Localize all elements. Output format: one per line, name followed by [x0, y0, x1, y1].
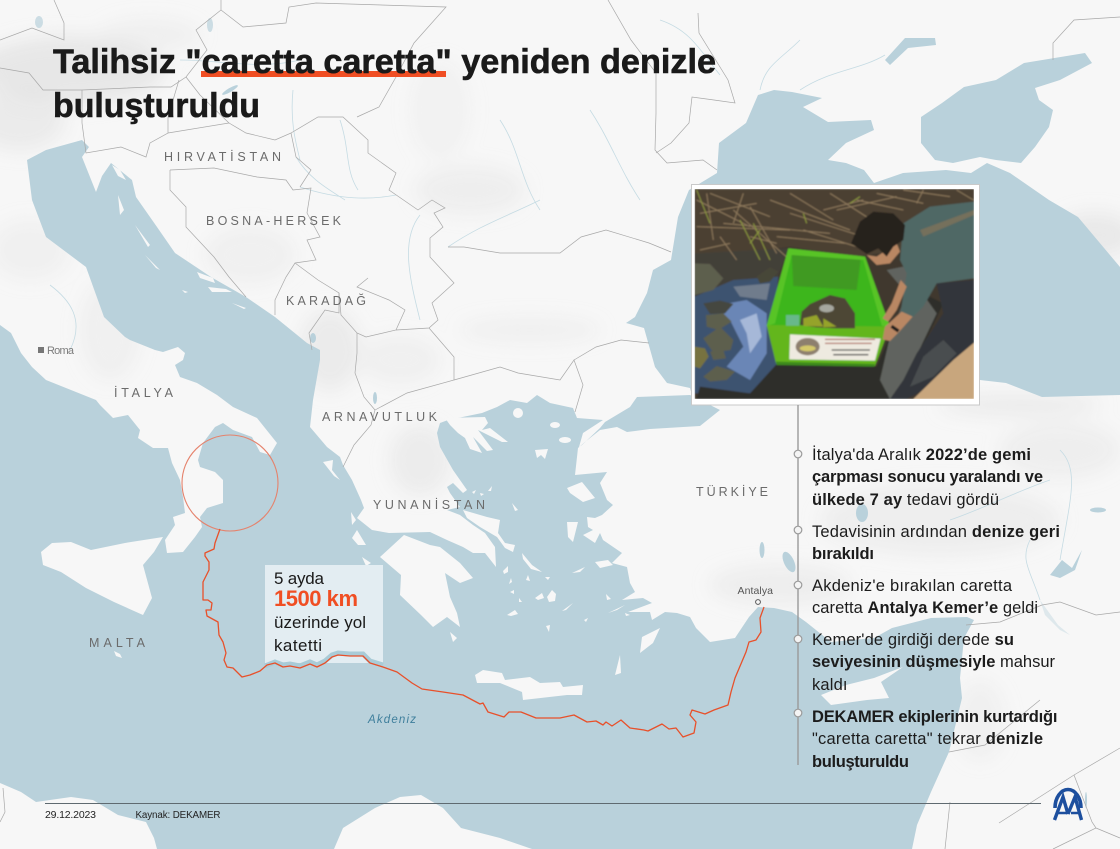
Chalkidiki	[445, 417, 508, 453]
man: waders	[890, 280, 974, 399]
water	[695, 277, 778, 393]
photo: rescued turtle	[692, 184, 980, 405]
Dalmatian islands	[118, 195, 246, 309]
crate label	[789, 334, 881, 361]
timeline text 2	[812, 523, 1060, 563]
title line 1: Talihsiz "caretta caretta" yeniden denizle	[53, 43, 716, 81]
label: Italy: İTALYA	[114, 386, 174, 400]
label: Malta: MALTA	[89, 636, 146, 650]
sea: Mediterranean, Adriatic and Aegean	[0, 140, 974, 849]
label: Turkey: TÜRKİYE	[696, 485, 768, 499]
timeline text 2: Tedavisinin ardından denize geri	[812, 523, 1060, 541]
turtle	[800, 295, 855, 328]
callout text: 1500 km	[274, 586, 358, 611]
timeline text 1: ülkede 7 ay tedavi gördü	[812, 491, 999, 509]
callout text	[274, 569, 366, 655]
timeline text 4: kaldı	[812, 676, 848, 694]
callout text: katetti	[274, 636, 322, 655]
title	[53, 43, 716, 125]
city marker: Antalya: Antalya	[738, 585, 773, 597]
timeline text 1: İtalya'da Aralık 2022’de gemi	[812, 445, 1031, 464]
icon: news agency logo	[1054, 790, 1082, 820]
rocks	[695, 263, 778, 382]
timeline text 1	[812, 445, 1043, 509]
Euboea	[463, 510, 515, 552]
rivers	[50, 20, 1072, 600]
timeline text 4	[812, 631, 1056, 694]
title line 2: buluşturuldu	[53, 87, 260, 125]
bank	[695, 189, 974, 399]
timeline text 4: Kemer'de girdiği derede su	[812, 631, 1014, 649]
label: Croatia: HIRVATİSTAN	[164, 150, 281, 164]
migration route	[203, 529, 764, 737]
Sicily	[41, 537, 163, 615]
highlight circle: Calabria	[182, 435, 278, 531]
city marker: Antalya	[738, 585, 773, 604]
label: Montenegro: KARADAĞ	[286, 293, 366, 308]
Lesbos, Chios, Samos, Ikaria, Kos	[567, 482, 625, 613]
timeline text 2: bırakıldı	[812, 545, 874, 563]
sea label: Akdeniz: Akdeniz	[367, 714, 416, 726]
footer	[45, 804, 1041, 821]
Karpathos	[615, 655, 621, 675]
callout: 1500 km	[265, 565, 383, 666]
man: shirt	[900, 202, 974, 317]
islands	[41, 165, 903, 705]
label: Bosnia: BOSNA-HERSEK	[206, 214, 342, 228]
timeline text 3: caretta Antalya Kemer’e geldi	[812, 599, 1038, 617]
Malta	[114, 651, 122, 658]
north Aegean and Cycladic islands	[450, 408, 630, 642]
route halo	[265, 653, 383, 666]
timeline text 3	[812, 577, 1038, 617]
label: Greece: YUNANİSTAN	[373, 498, 485, 512]
timeline text 1: çarpması sonucu yaralandı ve	[812, 468, 1043, 486]
city label: Roma: Roma	[47, 345, 75, 357]
country labels	[89, 150, 768, 650]
Ionian islands	[323, 460, 371, 566]
timeline text 5: DEKAMER ekiplerinin kurtardığı	[812, 708, 1058, 726]
label: Albania: ARNAVUTLUK	[322, 410, 438, 424]
timeline text 5	[812, 708, 1058, 771]
date: 29.12.2023	[45, 809, 96, 821]
Peloponnese	[380, 535, 473, 627]
Kvarner	[112, 165, 126, 180]
timeline text 3: Akdeniz'e bırakılan caretta	[812, 577, 1013, 595]
Crete	[475, 670, 583, 700]
callout text: üzerinde yol	[274, 613, 366, 632]
timeline connector	[794, 405, 802, 765]
timeline text 5: buluşturuldu	[812, 753, 909, 771]
crate	[767, 248, 890, 327]
title underline	[201, 71, 446, 77]
Rhodes	[640, 628, 660, 653]
man: head	[867, 243, 900, 265]
source: Kaynak: DEKAMER	[136, 810, 220, 821]
sea: Sea of Azov	[921, 53, 1092, 163]
Cyprus	[821, 667, 903, 705]
man: arms	[883, 280, 907, 322]
callout text: 5 ayda	[274, 569, 325, 588]
timeline text 5: "caretta caretta" tekrar denizle	[812, 730, 1043, 748]
timeline text 4: seviyesinin düşmesiyle mahsur	[812, 653, 1056, 671]
twigs	[697, 190, 973, 260]
sea: Black Sea	[626, 90, 1120, 397]
